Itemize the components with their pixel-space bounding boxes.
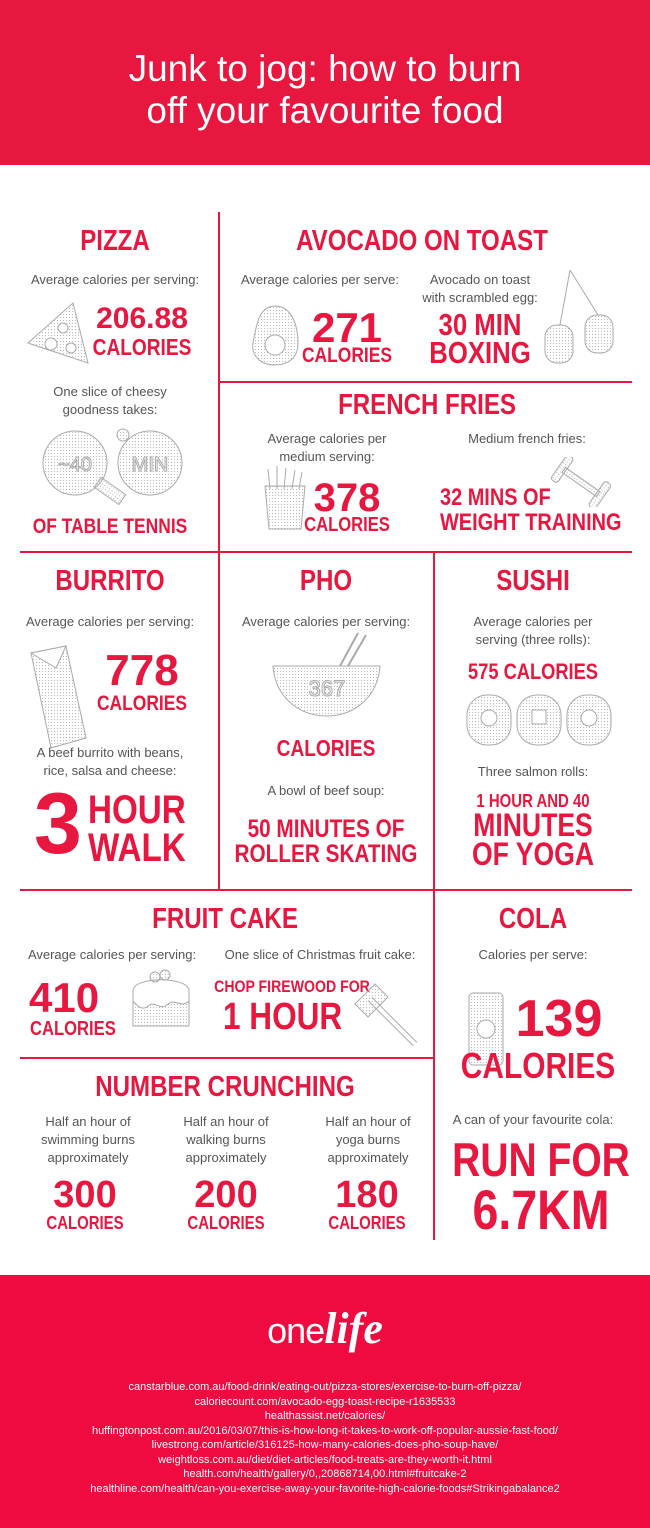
text: beef burrito: A beef burrito with beans, — [37, 745, 183, 760]
icon: fruit cake — [132, 970, 190, 1026]
stat: 3 hour walk: 3 — [34, 776, 82, 872]
stat: 778: 778 — [105, 646, 179, 695]
stat: swimming: approximately — [48, 1150, 128, 1165]
title: off your favourite food — [146, 90, 504, 131]
stat: yoga: 180 — [335, 1174, 399, 1216]
text: sources: healthline.com/health/can-you-exercise-away-your-favorite-high-calorie-foods#Strikingabalance2 — [90, 1482, 560, 1494]
text: fries avg — [268, 431, 386, 464]
stat: swimming: 300 — [53, 1174, 117, 1216]
stat: walking: approximately — [186, 1150, 266, 1165]
stat: yoga — [325, 1114, 411, 1233]
icon: cola can — [468, 992, 504, 1066]
stat: roller skating: 50 MINUTES OF — [248, 815, 404, 843]
stat: run — [452, 1133, 630, 1241]
heading: pho: PHO — [300, 565, 352, 597]
panel: burrito: WALK — [88, 826, 186, 870]
text: fries avg: Average calories per — [268, 431, 386, 446]
text: christmas cake: One slice of Christmas fruit cake: — [225, 947, 415, 962]
stat: roller skating: ROLLER SKATING — [235, 840, 417, 868]
text: can of cola: A can of your favourite cola: — [453, 1112, 613, 1127]
heading: pizza: PIZZA — [80, 225, 150, 257]
title: Junk to jog: how to burn — [129, 48, 521, 89]
stat: swimming: Half an hour of — [45, 1114, 131, 1129]
stat: yoga: Half an hour of — [325, 1114, 411, 1129]
text: sushi avg: Average calories per — [474, 614, 592, 629]
stat: 410: 410 — [29, 974, 99, 1021]
icon: pizza slice — [27, 302, 89, 364]
panel: pizza — [27, 225, 199, 538]
panel: avocado on toast: CALORIES — [302, 344, 392, 367]
stat: weight training: WEIGHT TRAINING — [440, 509, 621, 536]
panel: burrito: HOUR — [88, 788, 186, 832]
stat: boxing — [429, 307, 531, 370]
stat: pizza calories: 206.88 — [96, 302, 188, 335]
stat: walking: walking burns — [186, 1132, 266, 1147]
text: cheesy: goodness takes: — [63, 402, 157, 417]
icon: table tennis paddles: ~40 — [58, 454, 92, 476]
icon: sushi rolls — [466, 694, 612, 746]
text: beef burrito: rice, salsa and cheese: — [44, 763, 176, 778]
text: fries avg: medium serving: — [279, 449, 375, 464]
text: sources — [90, 1381, 560, 1494]
icon: axe — [354, 983, 417, 1046]
icon: table tennis paddles — [42, 428, 182, 506]
panel: fruit cake: 1 HOUR — [223, 996, 342, 1038]
panel: pho — [235, 565, 417, 868]
text: cola per serve: Calories per serve: — [478, 947, 588, 962]
text: sources: livestrong.com/article/316125-how-many-calories-does-pho-soup-have/ — [152, 1439, 498, 1451]
text: beef soup: A bowl of beef soup: — [267, 783, 385, 798]
panel: fruit cake — [28, 903, 417, 1046]
panel: french fries — [264, 389, 621, 536]
logo: onelife: onelife — [267, 1304, 383, 1353]
stat: swimming: swimming burns — [41, 1132, 135, 1147]
text: fruit cake avg: Average calories per serving: — [28, 947, 196, 962]
stat: 575: 575 CALORIES — [468, 659, 598, 684]
stat: boxing: 30 MIN — [439, 307, 521, 342]
text: salmon rolls: Three salmon rolls: — [478, 764, 588, 779]
stat: run: 6.7KM — [473, 1178, 609, 1241]
text: cheesy: One slice of cheesy — [53, 384, 167, 399]
icon: fries — [264, 466, 306, 530]
stat: yoga: 1 HOUR AND 40 — [476, 791, 590, 811]
text: avocado avg: Average calories per serve: — [241, 272, 399, 287]
stat: swimming: CALORIES — [46, 1213, 124, 1233]
stat: roller skating — [235, 815, 417, 868]
panel: pizza: CALORIES — [93, 334, 191, 360]
text: sources: healthassist.net/calories/ — [265, 1410, 385, 1422]
text: sushi avg — [474, 614, 592, 647]
stat: walking: Half an hour of — [183, 1114, 269, 1129]
stat: weight training — [440, 484, 621, 536]
stat: boxing: BOXING — [429, 335, 531, 370]
stat: walking: 200 — [194, 1174, 258, 1216]
text: cheesy — [53, 384, 167, 417]
text: sources: weightloss.com.au/diet/diet-articles/food-treats-are-they-worth-it.html — [158, 1454, 492, 1466]
panel: burrito: CALORIES — [97, 692, 187, 715]
panel: cola — [452, 903, 630, 1241]
panel: cola: CALORIES — [461, 1045, 615, 1086]
icon: pho bowl — [272, 632, 380, 716]
panel: sushi — [466, 565, 612, 872]
panel: avocado on toast — [241, 225, 614, 370]
header — [0, 0, 650, 165]
heading: sushi: SUSHI — [496, 565, 570, 597]
panel: number crunching — [41, 1071, 411, 1233]
stat: yoga: CALORIES — [328, 1213, 406, 1233]
stat: yoga: approximately — [328, 1150, 408, 1165]
icon: pho bowl: 367 — [309, 676, 345, 701]
text: scrambled egg: Avocado on toast — [430, 272, 530, 287]
text: sources: huffingtonpost.com.au/2016/03/07/this-is-how-long-it-takes-to-work-off-popular-aussie-fast-food/ — [92, 1424, 558, 1436]
text: scrambled egg: with scrambled egg: — [422, 290, 538, 305]
stat: swimming — [41, 1114, 135, 1233]
stat: 271: 271 — [312, 304, 382, 351]
panel: fruit cake: CALORIES — [30, 1018, 116, 1040]
text: pho avg: Average calories per serving: — [242, 614, 410, 629]
heading: fruit cake: FRUIT CAKE — [152, 903, 298, 935]
panel: french fries: CALORIES — [304, 514, 390, 536]
icon: burrito — [30, 645, 86, 749]
text: sources: canstarblue.com.au/food-drink/eating-out/pizza-stores/exercise-to-burn-off-pizza/ — [129, 1381, 521, 1393]
stat: 378: 378 — [314, 476, 380, 520]
heading: fries: FRENCH FRIES — [338, 389, 516, 421]
icon: dumbbell — [551, 457, 611, 507]
stat: 139: 139 — [516, 990, 602, 1048]
stat: walking: CALORIES — [187, 1213, 265, 1233]
heading: burrito: BURRITO — [55, 565, 165, 597]
title — [129, 48, 521, 131]
text: pizza avg: Average calories per serving: — [31, 272, 199, 287]
heading: cola: COLA — [499, 903, 567, 935]
heading: number crunching: NUMBER CRUNCHING — [95, 1071, 355, 1103]
text: scrambled egg — [422, 272, 538, 305]
footer — [0, 1275, 650, 1528]
stat: yoga: yoga burns — [336, 1132, 400, 1147]
text: medium fries: Medium french fries: — [468, 431, 586, 446]
panel: sushi: MINUTES — [473, 807, 593, 843]
icon: table tennis paddles: MIN — [132, 454, 168, 476]
text: sources: caloriecount.com/avocado-egg-toast-recipe-r1635533 — [194, 1396, 456, 1408]
text: beef burrito — [36, 745, 183, 778]
text: burrito avg: Average calories per serving: — [26, 614, 194, 629]
stat: firewood: CHOP FIREWOOD FOR — [214, 977, 370, 996]
panel: burrito — [26, 565, 194, 872]
text: sources: health.com/health/gallery/0,,20868714,00.html#fruitcake-2 — [183, 1468, 467, 1480]
stat: walking — [183, 1114, 269, 1233]
stat: weight training: 32 MINS OF — [440, 484, 551, 511]
panel: sushi: OF YOGA — [472, 836, 594, 872]
stat: pho calories: CALORIES — [277, 735, 375, 761]
text: sushi avg: serving (three rolls): — [476, 632, 590, 647]
stat: run: RUN FOR — [452, 1133, 630, 1186]
text: table tennis: OF TABLE TENNIS — [33, 515, 187, 538]
icon: boxing gloves — [544, 270, 614, 364]
icon: avocado — [252, 306, 298, 366]
heading: avocado: AVOCADO ON TOAST — [296, 225, 548, 257]
